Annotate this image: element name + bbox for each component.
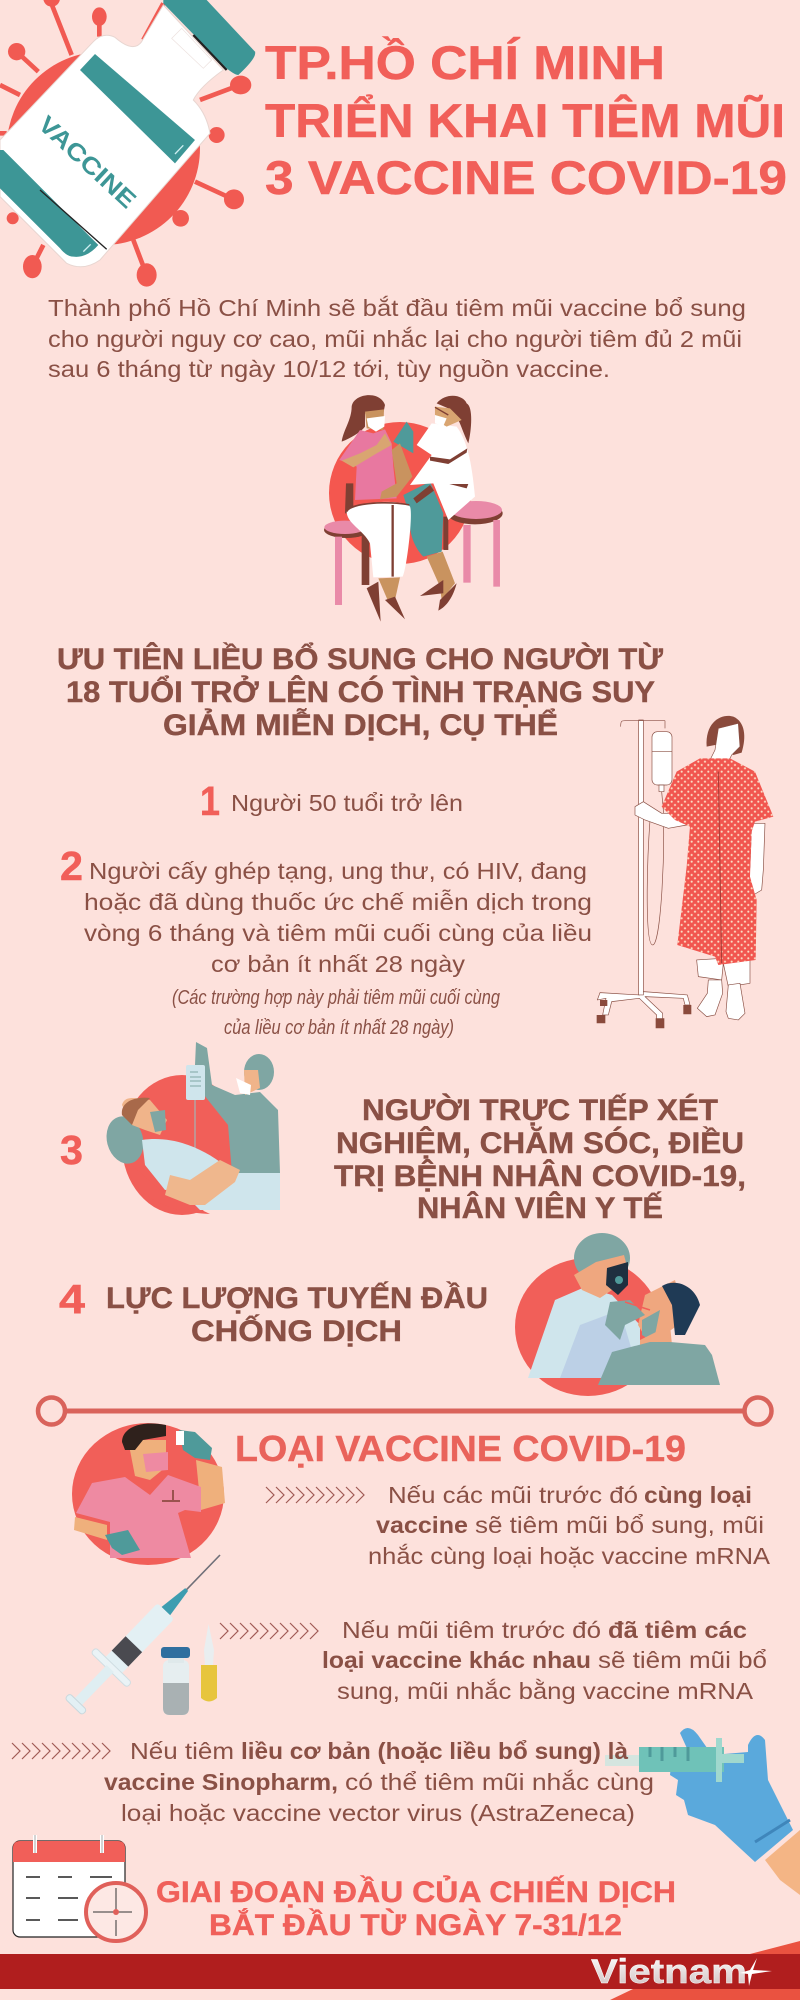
icon: calendar and clock <box>13 1835 146 1941</box>
illustration: nurse with patient <box>101 1042 280 1215</box>
bullet 3: vaccine Sinopharm, <box>104 1769 338 1795</box>
illustration: gloved hand with syringe <box>605 1728 800 1895</box>
ampoule <box>201 1624 217 1702</box>
bullet 1: cùng loại <box>644 1482 752 1508</box>
item 4 <box>59 1276 488 1348</box>
heading: campaign start date: BẮT ĐẦU TỪ NGÀY 7-31/12 <box>209 1908 622 1942</box>
bullet 3: Nếu tiêm <box>130 1738 234 1764</box>
bullet 2: loại vaccine khác nhau <box>322 1647 591 1673</box>
chevron arrows <box>12 1743 110 1759</box>
heading: item 3: TRỊ BỆNH NHÂN COVID-19, <box>334 1159 746 1193</box>
bullet 1: sẽ tiêm mũi bổ sung, mũi <box>475 1512 764 1538</box>
icon: vaccine bottle over virus <box>0 0 255 287</box>
bullet 2: Nếu mũi tiêm trước đó <box>342 1617 601 1643</box>
title: TP.HỒ CHÍ MINH <box>265 36 665 89</box>
bullet 2 <box>220 1617 767 1704</box>
title: TRIỂN KHAI TIÊM MŨI <box>265 94 785 147</box>
heading: campaign start date <box>156 1875 676 1942</box>
bullet 1 <box>266 1482 770 1569</box>
item 2: 2 <box>60 843 83 889</box>
plus sign <box>740 1958 772 1986</box>
vial <box>161 1647 190 1715</box>
footer bar with Vietnam+ logo: Vietnam <box>591 1953 747 1991</box>
bullet 1: nhắc cùng loại hoặc vaccine mRNA <box>368 1543 770 1569</box>
item 1: Người 50 tuổi trở lên <box>231 790 463 816</box>
virus <box>0 0 251 287</box>
illustration: doctor vaccinating pregnant woman <box>324 395 503 622</box>
heading: priority groups: 18 TUỔI TRỞ LÊN CÓ TÌNH TRẠNG SUY <box>66 675 655 709</box>
heading: campaign start date: GIAI ĐOẠN ĐẦU CỦA CHIẾN DỊCH <box>156 1875 676 1909</box>
bullet 1: Nếu các mũi trước đó <box>388 1482 638 1508</box>
item 2 note: của liều cơ bản ít nhất 28 ngày) <box>224 1017 454 1039</box>
illustration: nasal swab test <box>515 1233 720 1396</box>
heading: priority groups: ƯU TIÊN LIỀU BỔ SUNG CHO NGƯỜI TỪ <box>57 642 663 676</box>
item 2: hoặc đã dùng thuốc ức chế miễn dịch trong <box>84 889 592 915</box>
bullet 2: đã tiêm các <box>608 1617 747 1643</box>
item 2: vòng 6 tháng và tiêm mũi cuối cùng của liều <box>84 920 592 946</box>
chevron arrows <box>220 1623 318 1639</box>
bullet 3: liều cơ bản (hoặc liều bổ sung) là <box>241 1738 629 1764</box>
bullet 2: sẽ tiêm mũi bổ <box>598 1647 767 1673</box>
item 2: Người cấy ghép tạng, ung thư, có HIV, đang <box>89 858 587 884</box>
intro text: sau 6 tháng từ ngày 10/12 tới, tùy nguồn vaccine. <box>48 356 610 382</box>
item 2: cơ bản ít nhất 28 ngày <box>211 951 465 977</box>
item 4: LỰC LƯỢNG TUYẾN ĐẦU <box>106 1281 488 1315</box>
bullet 3: có thể tiêm mũi nhắc cùng <box>345 1769 654 1795</box>
title <box>265 36 787 204</box>
chevron arrows <box>266 1487 364 1503</box>
syringe <box>55 1538 238 1724</box>
item 2 note <box>172 987 500 1039</box>
heading: item 3: NHÂN VIÊN Y TẾ <box>417 1191 663 1225</box>
heading: priority groups: GIẢM MIỄN DỊCH, CỤ THỂ <box>163 708 558 742</box>
heading: priority groups <box>57 642 663 742</box>
bullet 3 <box>12 1738 654 1826</box>
illustration: syringe and vials <box>55 1538 238 1724</box>
intro text: Thành phố Hồ Chí Minh sẽ bắt đầu tiêm mũi vaccine bổ sung <box>48 295 746 321</box>
bullet 2: sung, mũi nhắc bằng vaccine mRNA <box>337 1678 753 1704</box>
item 2 note: (Các trường hợp này phải tiêm mũi cuối cùng <box>172 987 500 1009</box>
item 1 <box>200 778 463 824</box>
item 4: CHỐNG DỊCH <box>191 1314 402 1348</box>
bottle <box>0 5 223 267</box>
intro text <box>48 295 746 382</box>
title: 3 VACCINE COVID-19 <box>265 151 787 204</box>
illustration: patient with IV stand <box>597 716 773 1028</box>
heading: item 3: NGƯỜI TRỰC TIẾP XÉT <box>362 1093 718 1127</box>
bullet 3: loại hoặc vaccine vector virus (AstraZeneca) <box>121 1800 635 1826</box>
number 3: 3 <box>60 1127 83 1173</box>
item 2 <box>60 843 592 1039</box>
heading: item 3 <box>334 1093 746 1225</box>
heading: item 3: NGHIỆM, CHĂM SÓC, ĐIỀU <box>336 1126 744 1160</box>
illustration: nurse holding vial <box>72 1423 225 1565</box>
footer bar with Vietnam+ logo <box>0 1941 800 2000</box>
item 4: 4 <box>59 1276 85 1322</box>
item 1: 1 <box>200 778 220 824</box>
bullet 1: vaccine <box>376 1512 468 1538</box>
bottle label: VACCINE <box>33 111 141 214</box>
intro text: cho người nguy cơ cao, mũi nhắc lại cho người tiêm đủ 2 mũi <box>48 326 742 352</box>
divider with end circles <box>38 1398 772 1424</box>
heading: vaccine types: LOẠI VACCINE COVID-19 <box>235 1428 686 1469</box>
